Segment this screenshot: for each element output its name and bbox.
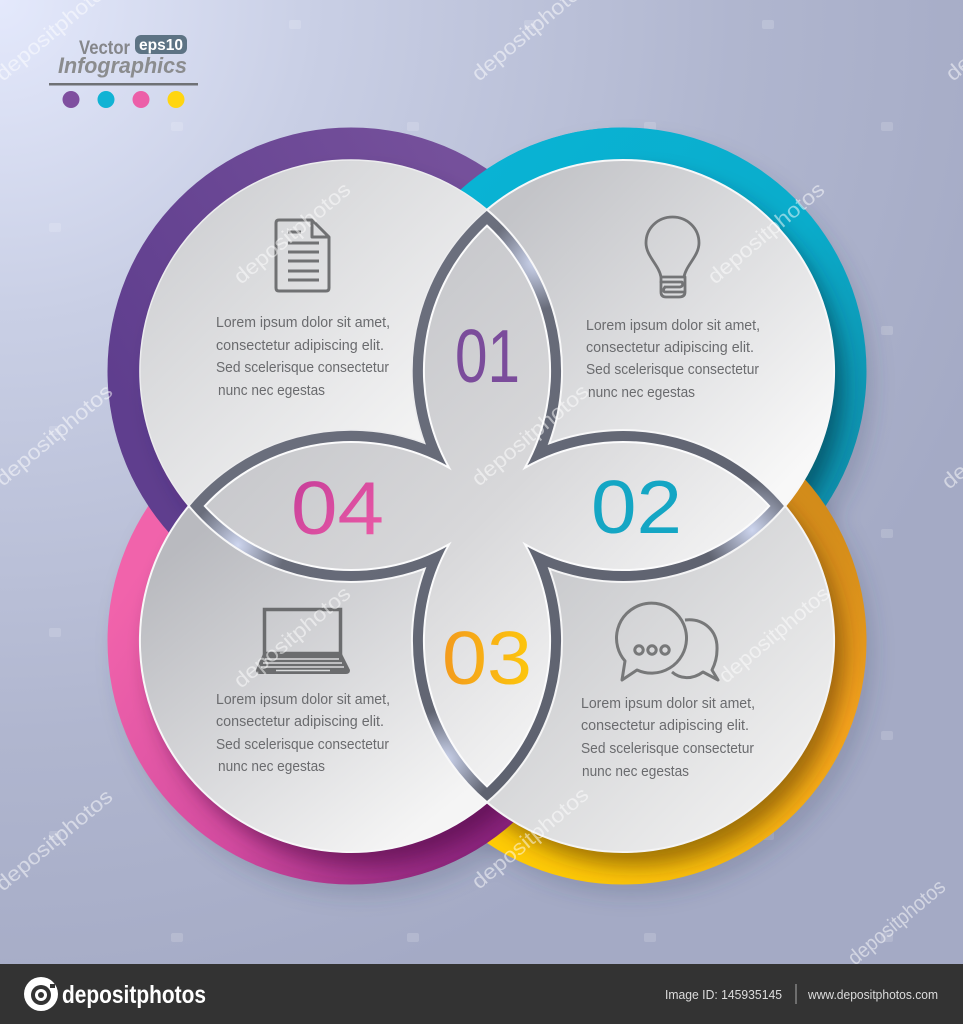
legend colour dots bbox=[62, 91, 184, 108]
text block: bottom-left: Sed scelerisque consectetur bbox=[216, 736, 389, 753]
icon: chat bubbles bbox=[617, 603, 718, 680]
text block: top-right: Sed scelerisque consectetur bbox=[586, 361, 759, 378]
text block: top-left: Lorem ipsum dolor sit amet, bbox=[216, 314, 390, 331]
text block: top-left: consectetur adipiscing elit. bbox=[216, 337, 384, 354]
text block: bottom-right: Lorem ipsum dolor sit amet, bbox=[581, 695, 755, 712]
ring: pink bbox=[108, 506, 514, 884]
icon: document bbox=[276, 220, 329, 291]
text block: top-right: nunc nec egestas bbox=[588, 384, 695, 401]
depositphotos watermarks: depositphotos bbox=[467, 783, 593, 894]
text block: bottom-right: Sed scelerisque consectetur bbox=[581, 740, 754, 757]
panel: bottom-right circle bbox=[487, 506, 834, 852]
number 01: 01 bbox=[455, 314, 520, 398]
footer bar bbox=[0, 964, 963, 1024]
panel: top-right circle bbox=[487, 160, 834, 506]
text block: bottom-left: consectetur adipiscing elit. bbox=[216, 713, 384, 730]
text block: top-right: consectetur adipiscing elit. bbox=[586, 339, 754, 356]
number 02: 02 bbox=[591, 465, 682, 549]
ring drop shadows bbox=[116, 140, 874, 896]
icon: laptop bbox=[256, 610, 350, 674]
panel: central four-petal flower bbox=[205, 226, 769, 786]
icon: light bulb bbox=[646, 217, 699, 297]
ring: teal bbox=[487, 128, 866, 506]
text block: top-right: Lorem ipsum dolor sit amet, bbox=[586, 317, 760, 334]
footer bar: www.depositphotos.com bbox=[807, 987, 938, 1002]
depositphotos watermarks: depositphotos bbox=[467, 380, 593, 491]
logo: Vector Infographics eps10: Vector bbox=[79, 38, 131, 59]
text block: bottom-right: consectetur adipiscing elit. bbox=[581, 717, 749, 734]
text block: top-left: nunc nec egestas bbox=[218, 382, 325, 399]
depositphotos watermarks: depositphotos bbox=[843, 875, 950, 970]
depositphotos watermarks: depositphotos bbox=[714, 582, 834, 688]
logo: Vector Infographics eps10 bbox=[49, 35, 198, 86]
panel: top-left circle bbox=[140, 160, 487, 506]
groove between circles and flower bbox=[189, 210, 785, 802]
number 04: 04 bbox=[291, 466, 384, 550]
ring: purple bbox=[108, 128, 487, 532]
text block: bottom-right: nunc nec egestas bbox=[582, 763, 689, 780]
text block: top-right bbox=[586, 317, 760, 401]
text block: bottom-left: nunc nec egestas bbox=[218, 758, 325, 775]
text block: top-left bbox=[216, 314, 390, 399]
icon: depositphotos camera logo bbox=[24, 977, 58, 1011]
footer bar: Image ID: 145935145 bbox=[665, 987, 782, 1002]
text block: bottom-left bbox=[216, 691, 390, 775]
camera watermark icons bbox=[49, 20, 893, 942]
logo: Vector Infographics eps10: eps10 bbox=[139, 37, 183, 54]
panel: bottom-left circle bbox=[140, 506, 487, 852]
text block: bottom-left: Lorem ipsum dolor sit amet, bbox=[216, 691, 390, 708]
text block: top-left: Sed scelerisque consectetur bbox=[216, 359, 389, 376]
footer bar: depositphotos bbox=[62, 981, 206, 1009]
depositphotos watermarks: depositphotos bbox=[703, 178, 829, 289]
depositphotos watermarks: depositphotos bbox=[229, 178, 355, 289]
text block: bottom-right bbox=[581, 695, 755, 780]
number 03: 03 bbox=[442, 616, 532, 700]
ring: orange bbox=[487, 480, 866, 884]
depositphotos watermarks: depositphotos bbox=[229, 582, 355, 693]
ring: teal overlap on purple bbox=[460, 128, 620, 208]
logo: Vector Infographics eps10: Infographics bbox=[58, 53, 187, 78]
